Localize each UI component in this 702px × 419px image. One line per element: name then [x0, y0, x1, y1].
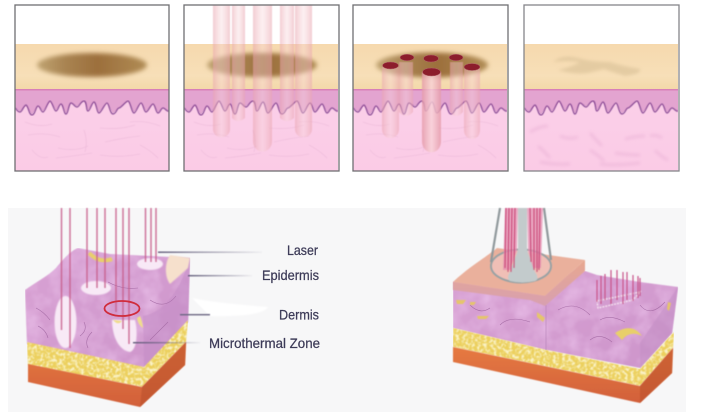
skin block — [25, 248, 190, 407]
thermal columns — [382, 62, 480, 152]
skin layers — [184, 44, 338, 171]
panel border — [353, 5, 508, 171]
handpiece — [491, 208, 551, 282]
panel: pigmented lesion before treatment — [15, 5, 169, 171]
coagulated dots — [382, 54, 480, 76]
diagram: skin block with laser handpiece — [453, 208, 678, 403]
label: Microthermal Zone: Microthermal Zone — [209, 335, 320, 351]
pigment spot — [37, 53, 147, 77]
panel: healed skin after treatment — [524, 5, 679, 171]
skin layers — [15, 44, 169, 171]
panel border — [184, 5, 339, 171]
label: Dermis: Dermis — [279, 306, 319, 322]
panel: lower background — [8, 208, 686, 412]
pink glow beside beams — [503, 208, 543, 270]
faded pigment — [553, 57, 640, 76]
skin layers — [353, 44, 507, 171]
laser entry spots and columns — [54, 258, 163, 352]
panel: microthermal zones in the skin — [353, 5, 508, 171]
diagram: skin block with laser and labels — [25, 208, 320, 407]
laser beams — [62, 208, 156, 348]
new collagen fibres — [530, 126, 668, 165]
beams in handpiece — [505, 208, 540, 272]
pigment spot — [376, 52, 488, 78]
label: Laser: Laser — [287, 242, 318, 258]
skin block — [453, 271, 678, 403]
label: Epidermis: Epidermis — [262, 267, 319, 283]
panel border — [15, 5, 169, 171]
white label blotch — [192, 298, 268, 316]
panel: laser columns entering the skin — [184, 5, 339, 171]
treated micro-beam grid — [597, 270, 640, 308]
laser columns — [213, 5, 312, 152]
pigment spot — [207, 53, 317, 77]
skin layers — [524, 44, 678, 171]
panel border — [524, 5, 679, 171]
leader lines — [133, 252, 262, 343]
red highlight circle — [104, 301, 140, 316]
raised treatment pad — [453, 248, 585, 306]
